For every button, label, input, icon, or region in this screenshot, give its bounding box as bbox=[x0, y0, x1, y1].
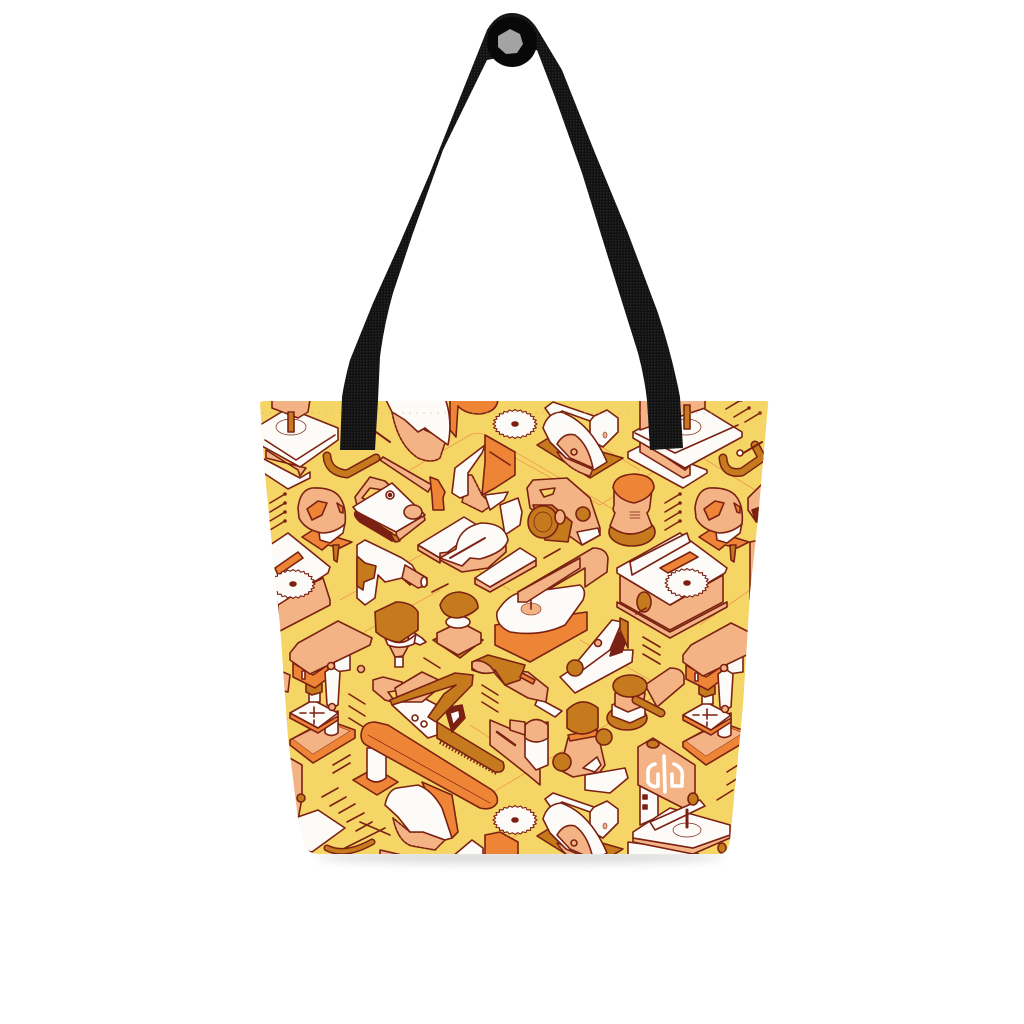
logo mark bbox=[648, 756, 682, 792]
circular saw top centre bbox=[385, 398, 498, 461]
miter saw fragment bottom bbox=[380, 832, 518, 858]
thin orange guide lines bbox=[285, 433, 755, 845]
stitching line bbox=[262, 412, 766, 414]
right edge fragments bbox=[748, 480, 766, 605]
bottom right blob bbox=[718, 843, 726, 853]
drill press top left bbox=[260, 400, 338, 489]
table saw right bbox=[617, 533, 727, 638]
orange beam bench bbox=[353, 722, 497, 809]
nails: centre right bbox=[665, 493, 681, 530]
circular saw lower left bbox=[385, 782, 458, 850]
band saw with logo bbox=[628, 738, 730, 855]
drill press right bbox=[682, 622, 748, 766]
wall peg bbox=[487, 17, 537, 67]
drill press left bbox=[290, 621, 372, 763]
planer bbox=[527, 478, 600, 545]
clamp top right bbox=[723, 442, 762, 472]
palm sander bbox=[433, 592, 483, 658]
nails: top right bbox=[726, 399, 761, 422]
chainsaw bbox=[373, 672, 504, 774]
nails: scattered singles bbox=[322, 549, 738, 831]
drill press top right bbox=[628, 398, 742, 488]
clamp left bbox=[327, 432, 390, 474]
fabric bbox=[255, 398, 775, 858]
clamp bottom bbox=[327, 822, 390, 851]
hand plane bbox=[560, 618, 633, 693]
power drill bbox=[357, 540, 427, 605]
router bbox=[553, 702, 628, 793]
bag body with tool pattern bbox=[255, 398, 775, 869]
hammer bbox=[380, 457, 445, 510]
drop shadow under bag bbox=[315, 851, 725, 863]
nail gun bbox=[375, 602, 426, 667]
left edge blob bbox=[283, 671, 291, 693]
multi tool bbox=[472, 655, 562, 717]
drill press bottom left bbox=[288, 757, 345, 852]
saw blade bottom bbox=[493, 806, 537, 834]
nails: upper left bbox=[270, 493, 286, 530]
miter saw bbox=[418, 435, 536, 592]
jigsaw right bbox=[695, 488, 749, 562]
sander with handle bbox=[607, 668, 684, 730]
random orbit sander bbox=[609, 474, 655, 546]
tote bag product illustration bbox=[260, 13, 768, 867]
belt sander bbox=[353, 477, 425, 542]
table saw left bbox=[270, 533, 330, 632]
straps bbox=[340, 13, 683, 450]
nailer bbox=[490, 720, 548, 785]
jigsaw left bbox=[298, 488, 352, 562]
circular saw top right bbox=[537, 402, 623, 478]
circular saw bottom right bbox=[537, 793, 623, 869]
saw blade top bbox=[493, 410, 537, 438]
scroll saw bbox=[495, 548, 608, 662]
